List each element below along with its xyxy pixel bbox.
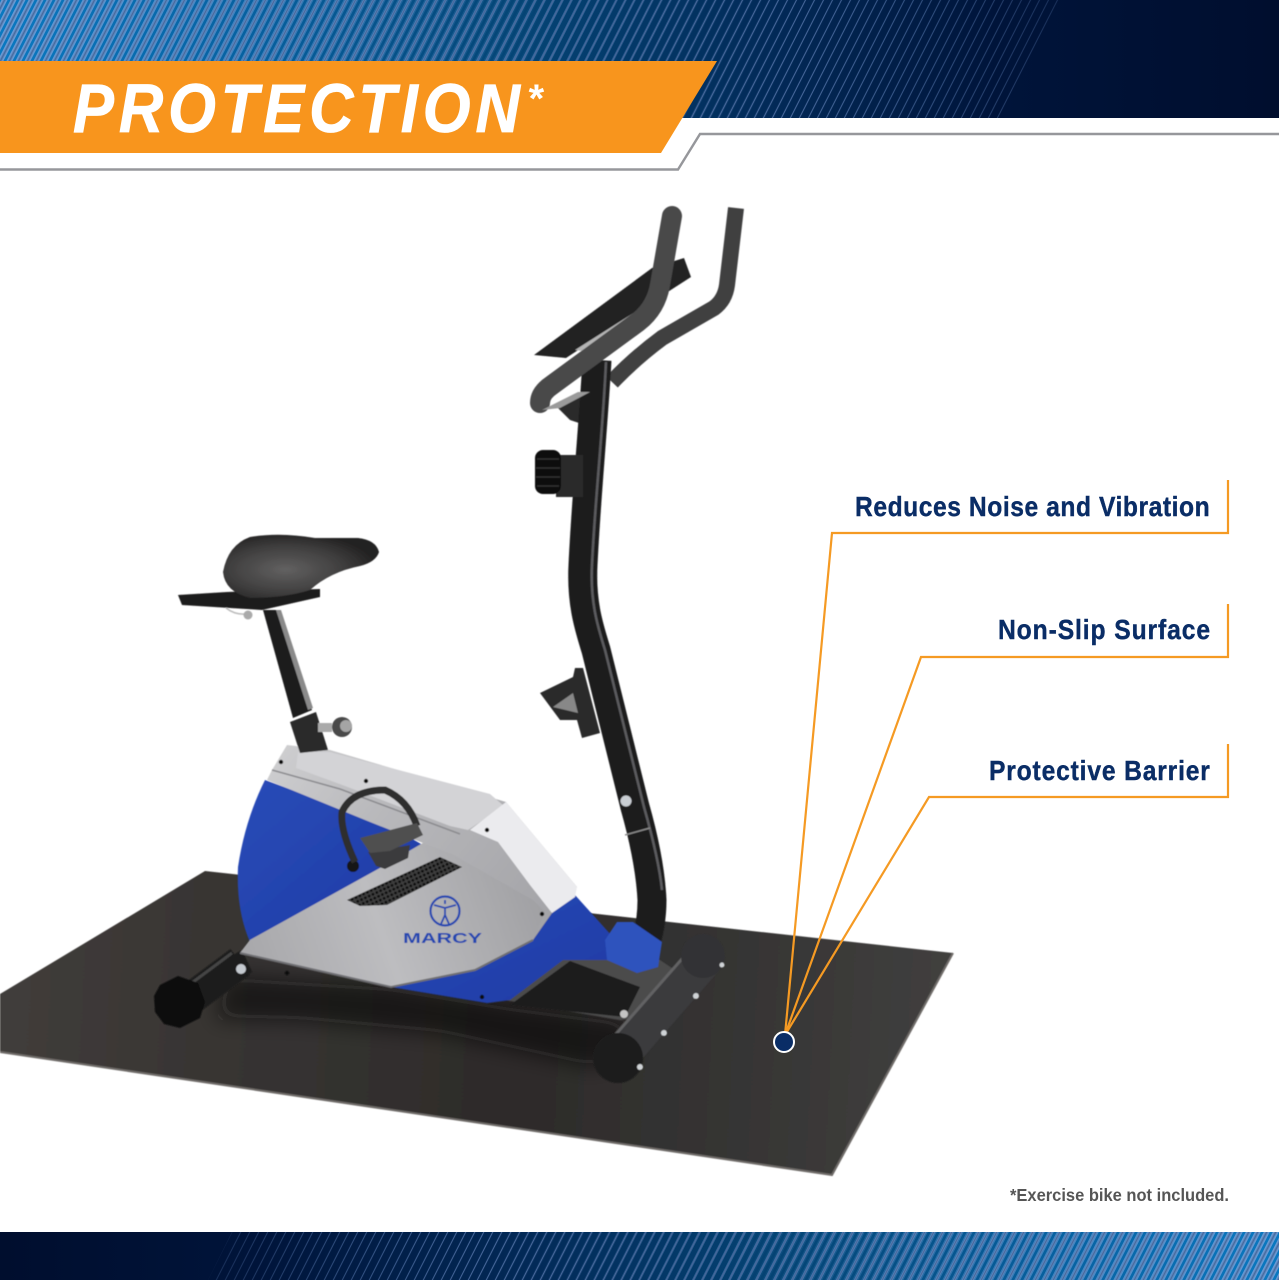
post base collar bbox=[605, 922, 662, 973]
label: protective barrier: Protective Barrier bbox=[989, 755, 1210, 786]
marcy logo bbox=[403, 896, 482, 947]
footnote: *Exercise bike not included. bbox=[1010, 1185, 1229, 1205]
title: PROTECTION bbox=[73, 70, 522, 147]
callout lines bbox=[785, 480, 1228, 1035]
marcy wordmark: MARCY bbox=[403, 930, 482, 947]
blue rear panel bbox=[238, 780, 428, 942]
label: non-slip surface: Non-Slip Surface bbox=[998, 614, 1210, 645]
saddle bbox=[223, 535, 379, 598]
resistance knob bbox=[535, 450, 583, 497]
header outline bbox=[0, 134, 1279, 170]
white header step bbox=[0, 118, 1279, 169]
vent grille bbox=[347, 857, 462, 906]
title asterisk: * bbox=[527, 77, 545, 121]
floor mat bbox=[0, 871, 953, 1175]
white rear fairing bbox=[470, 802, 577, 913]
rear handlebar bbox=[612, 208, 736, 382]
pedal and strap bbox=[342, 790, 423, 872]
rear stabilizer bbox=[154, 950, 252, 1028]
seat adjustment knob bbox=[318, 717, 352, 737]
console bbox=[534, 258, 691, 358]
screws bbox=[279, 760, 633, 999]
handlebar mount bbox=[555, 395, 585, 425]
blue lower housing bbox=[391, 895, 612, 1003]
top banner band bbox=[0, 0, 1279, 118]
bottle holder bbox=[540, 668, 600, 738]
bottom band bbox=[0, 1232, 1279, 1280]
shroud lid bbox=[296, 752, 504, 830]
seat rail bbox=[178, 589, 320, 620]
exercise bike bbox=[154, 208, 736, 1083]
silver body shroud bbox=[240, 745, 577, 987]
lower silver panel bbox=[240, 843, 545, 987]
label: reduces noise and vibration: Reduces Noise and Vibration bbox=[855, 491, 1210, 522]
bike shadow on mat bbox=[215, 975, 635, 1068]
foot cover bbox=[505, 958, 672, 1020]
front stabilizer bbox=[593, 934, 725, 1083]
title banner bbox=[0, 61, 717, 153]
callout marker bbox=[774, 1032, 794, 1052]
front handlebar bbox=[540, 216, 672, 410]
seat post bbox=[263, 610, 328, 753]
upright tube bbox=[583, 360, 662, 948]
shroud groove bbox=[272, 770, 460, 834]
